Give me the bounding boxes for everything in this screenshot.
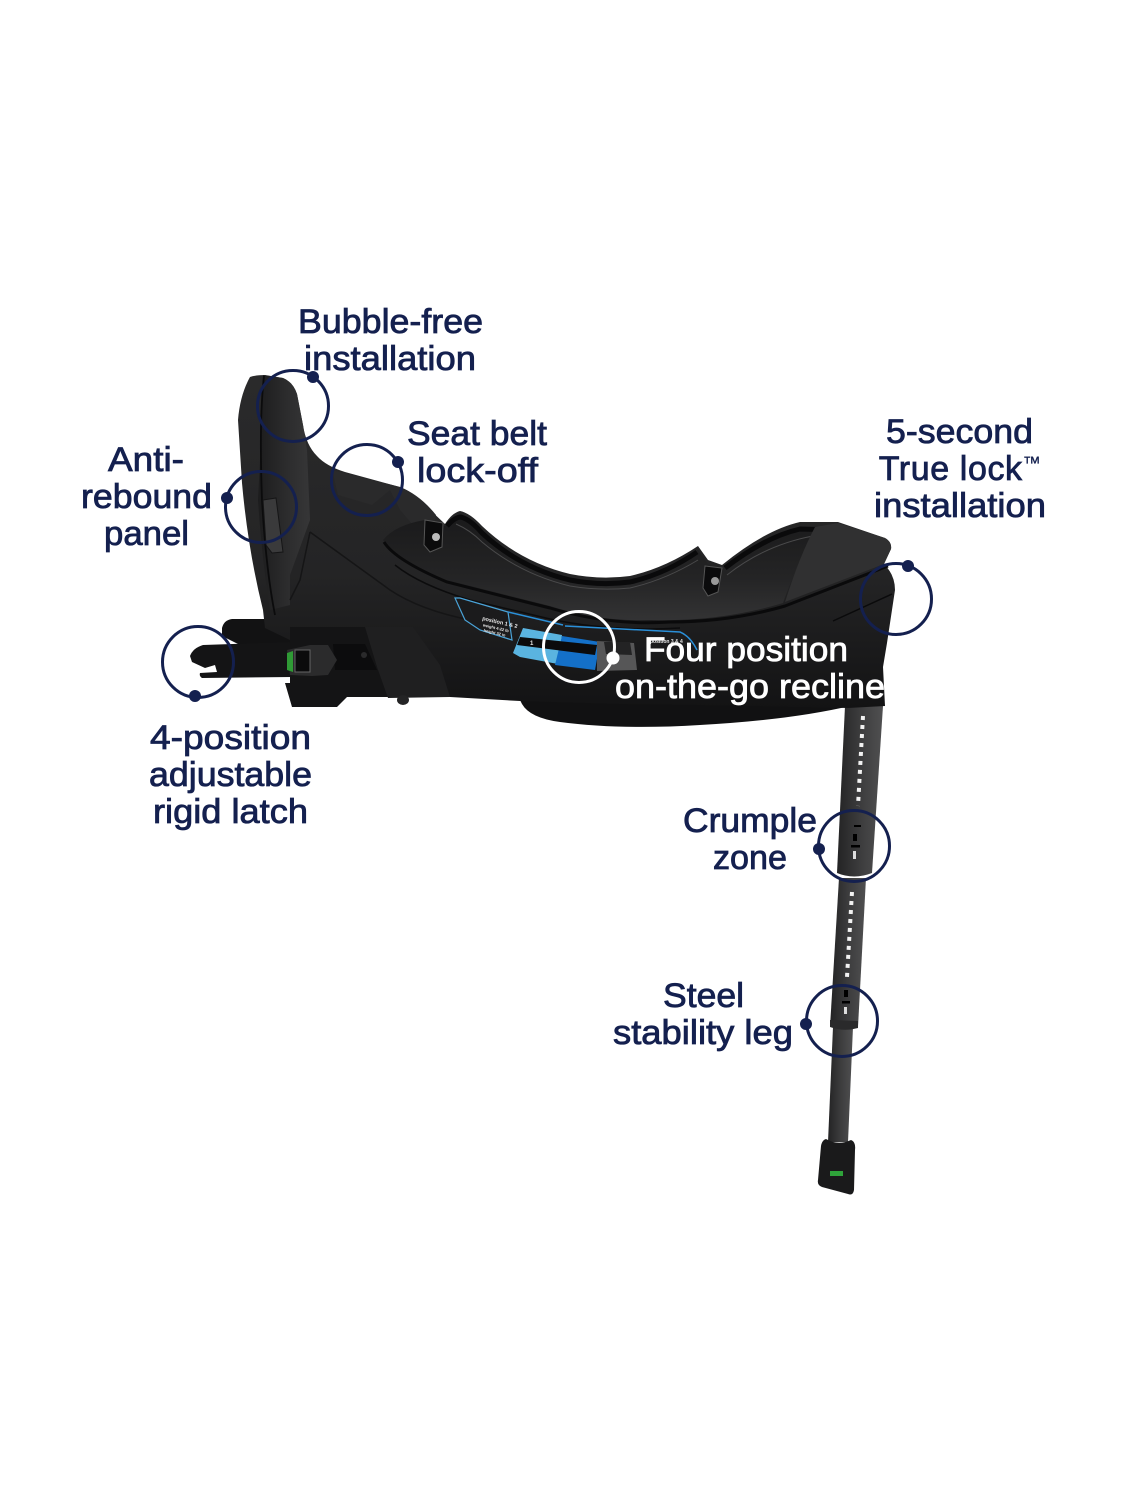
callout: seat belt lock-off [332,415,548,516]
label text: position 1 & 2 [482,616,518,630]
recline blue line [508,612,697,650]
product: car seat base [190,375,895,1194]
callout: four position on-the-go recline [544,612,885,706]
callout: 4-position adjustable rigid latch: 4-position [150,719,311,757]
base foot [397,695,409,705]
callout: bubble-free installation [258,303,483,442]
side wall crease [290,532,470,620]
selector number: 1 [530,641,534,647]
label text right: position 3 & 4 [650,639,683,645]
callout: bubble-free installation: installation [304,340,476,378]
recline label left [455,598,518,640]
callout: seat belt lock-off: lock-off [417,452,539,490]
right slot [703,566,722,596]
callout: crumple zone: zone [713,839,787,877]
label text: height 32 in [483,628,507,638]
callout: anti-rebound panel: Anti- [108,441,184,479]
latch indicator green [287,651,293,672]
callout: 5-second True lock installation: ™ [1023,453,1041,473]
stability leg [818,706,883,1194]
latch connector bar [333,644,377,670]
right side slit [833,594,892,621]
front latch arm [190,642,292,678]
callout: 5-second True lock installation [860,413,1046,634]
callout: 4-position adjustable rigid latch: rigid latch [153,793,308,831]
callout: anti-rebound panel: rebound [81,478,212,516]
basin interior [383,515,815,620]
callout: 5-second True lock installation: installation [874,487,1046,525]
recline selector [513,628,683,671]
rear latch arm [222,619,292,645]
backrest panel [258,375,310,610]
latch connector [287,645,337,676]
seat belt slot [424,520,443,552]
callout: 5-second True lock installation: True lock [879,450,1023,488]
callout: crumple zone: Crumple [683,802,817,840]
callout: 5-second True lock installation: 5-second [886,413,1033,451]
callout: seat belt lock-off: Seat belt [407,415,548,453]
basin rim highlight [456,524,698,589]
callout: four position on-the-go recline: Four position [644,631,848,669]
main shell [238,375,895,708]
callout: steel stability leg: stability leg [613,1014,793,1052]
anti-rebound tab [263,498,283,553]
callout: bubble-free installation: Bubble-free [298,303,483,341]
fender piece [365,627,450,698]
basin upper rim [447,517,697,584]
callout: four position on-the-go recline: on-the-go recline [615,668,885,706]
callout: steel stability leg: Steel [663,977,744,1015]
callout: 4-position adjustable rigid latch [149,626,312,831]
callout: crumple zone [683,802,890,882]
right basin rim [725,529,838,568]
tray underside [515,680,850,727]
callout: steel stability leg [613,977,878,1056]
callout: 4-position adjustable rigid latch: adjustable [149,756,312,794]
callout: anti-rebound panel: panel [104,515,189,553]
lower base block [285,627,450,707]
basin lip [384,542,888,623]
callout: anti-rebound panel [81,441,296,553]
right end cap [785,523,891,602]
label text [479,616,518,640]
seat belt guide ridge [332,470,436,545]
label text: weight 4-22 lb [481,622,510,633]
